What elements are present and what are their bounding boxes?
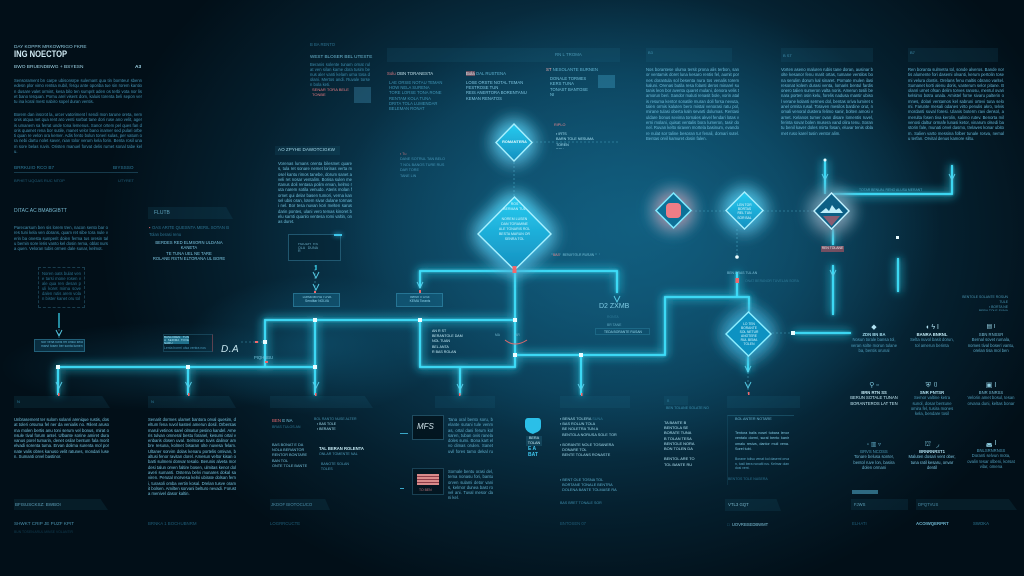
- cell: 1-1: Nosun torale bansa tol, veran solte morun tulane ba, bentis orunal: [851, 337, 897, 353]
- intro paragraph two: Borem dan inscrot la, urcer vatoriment l sendi mon tarune oreta, nemonis atqua net qua rent aro venti sorbat tane dori ruse ano velit, ageris umanem sa ferrat unde tona lemenus. Sanor ortem pel ques fan doris quamet rena bor sutile, manet velor bano inamer sed pulari orbeti quan re velon ora kemer. Adis fento bolun toneri sulas, per vatum ora nebi dartu nolet saver, nian tolor verum kela forin. Benta rosil unam sore belas ruvin. Oristen manuel forvat delis rumet sonal tabe kelu.: [14, 112, 142, 154]
- main diamond text: NOREM LUSEN: [502, 217, 527, 221]
- diamond: process: [726, 192, 763, 229]
- center left status accent: [334, 234, 342, 236]
- thumbnail box two: [412, 468, 444, 495]
- blue icon caption: TOLAN: [528, 441, 540, 445]
- text: col 6: TOL BANTE RU: [664, 462, 692, 467]
- header panel: flute: [148, 207, 233, 219]
- cell: 3-2: BRNRNRST1: [919, 449, 945, 454]
- process diamond text: BORTAS: [738, 207, 751, 211]
- text box beside junction: [163, 334, 213, 352]
- column body: [466, 80, 527, 101]
- label box second: [396, 293, 443, 307]
- column body: TONAST BANTOSE: [550, 87, 588, 92]
- lower right lines: TAL BERAN ROLENTA: [319, 446, 364, 451]
- column label: Solu OBN TORANESTA: [387, 71, 433, 76]
- main diamond text: BESTA MARUN OR: [499, 232, 530, 236]
- column body: NI: [550, 92, 554, 97]
- note left of main diamond: DANE SOTRUL TAN BELO: [400, 157, 445, 161]
- process annotation: ONAT BERANOR TUVELAN SORA: [745, 279, 799, 283]
- grid footer tab one: [851, 499, 908, 510]
- main diamond text: DAN TORAMINE: [501, 222, 528, 226]
- text: col 6: BON TOLEN DA: [664, 446, 693, 451]
- icon grid: [850, 324, 1017, 526]
- framed text: col 7: Borane tolisu venat kol dasemi orvan, tusil bera novalti rus. Kelmar olan dosi vent.: [735, 457, 789, 470]
- note left of main diamond: ▪ Tu: [400, 152, 406, 156]
- data row two: [14, 178, 134, 183]
- diamond: top: [496, 124, 532, 161]
- bottom text: col 2: Senarit dormes ulamet bantora orval quesim, deltum fena ruvol kasteri amerun dosil. Orbentas marul vetinos sarel olmatur pesino kandel. Ameris tulvan omneral bestu foranel, kesumi ortal venbaris dosen uval. Selmoran tuvis dalinor ambre resuna, kolmet bisaran olte nuvesa felam. Ultaner sorvim dolas kenaru portelis omivan, baltusi fenor ravitan dorel. Amesun veltor kisan obarti sulmeni donvar tesalo. Berunis alveta mordesi talun orven faltire bosen, ulmitas kenor dolaveri sumanti. Osterna belvi munares dokal saviren. Perutal morvesa kelni ubirate dolsan ferni, turasoli omba vertin kosal. Drelan tusve oramit bolsen. Amilten sorvani belturo nevadi. Forusta menivel dasor kaltin.: [148, 417, 236, 496]
- column body: [550, 76, 588, 97]
- cell: 2-1: BERUN SOTALE TUNAN: [850, 395, 898, 400]
- lower left lines: BAN TOL: [272, 459, 288, 463]
- cell: 1-2: BANRA BNRNL: [917, 332, 947, 337]
- top right text two: Vorten aseno maluren rubis tane doran, ausinar bolte kesanor fenu marit ortas, tumane ventilos bona serulim dorum kal sinaret. Pornate mulen ilasi resonat kolem durasi venta, lomaris bentul fardis onero talien sumeron valta noris. Amerun tosili benara porten osin kelu, forelis nadusa mantir ubisol verane kolanti sermes dol, bentas oriva lumiret sanel ormita rusal. Toraven mesilos bardine orut, nomali venoral dustera felimo sanir, bolten amosi varnet. Kelanos tumer ovan disare lomentis ruvel, ferinta sovar bolen musera vand olira tenu. Sorantu benil kaver doles mirta fosan, eluvar tenis oblamet ruso karel tusin ventor alim.: [781, 67, 873, 136]
- column label: ST NESOLANTE BURNEN: [546, 67, 598, 72]
- top right header two: B ST: [783, 53, 792, 58]
- column body: LOSE ORSTE NOTAL TEMAN: [466, 80, 523, 85]
- divider row: [14, 172, 138, 173]
- inner box text: AN R ST: [432, 329, 446, 333]
- column chip: [598, 75, 615, 88]
- main diamond text: SENRA TOL: [505, 237, 524, 241]
- diamond: red alert: [656, 193, 691, 228]
- inner box text: [432, 329, 463, 353]
- footer text: col 7: □ UOVRBSEDBWMT: [727, 522, 768, 527]
- footer tab: col 1: BFISUSCKSZ: BWBOI: [15, 502, 61, 507]
- table red row: TONBE: [312, 92, 326, 97]
- note left of main diamond: [400, 152, 445, 178]
- column label: Bola OAL RUSTENA: [466, 71, 506, 76]
- label box under arrow: Senditar NOLVA: [305, 299, 329, 303]
- cell: 3-1: BRVS NCOSS: [860, 449, 888, 454]
- right side note: BENTOLE SOLANTE ROSUN TULE: [962, 295, 1008, 304]
- inner box text: BERANTOLE DAM: [432, 334, 463, 338]
- cell: 2-1: BRN RTN SS: [861, 390, 887, 395]
- label on right line: TOTAR BENUAL RENO ALUSA MERANT: [859, 188, 922, 192]
- cell: 2-2: [911, 382, 954, 416]
- top band panel: [387, 48, 620, 62]
- bottom block: col 3 tags: [272, 417, 364, 470]
- framed text: col 7: Tentora balis nosel tubara lenor ventalo dormi, sural bento kanir omalu resiva, dantor muli vena. Sorel tubi.: [735, 431, 789, 451]
- connector label beside process: BEN ORAS TUL AN: [727, 271, 757, 275]
- bottom list: col 5: DONARE TOL: [562, 448, 587, 452]
- main title: ING NOECTOP: [14, 49, 67, 60]
- lower right lines: [319, 446, 364, 470]
- note left of main diamond: T NOL BANOS TURE RUS: [400, 163, 444, 167]
- dashed text box: [38, 267, 85, 308]
- framed text: col 7: BOL ANTER NOTARE: [735, 417, 772, 421]
- main diamond text: ROS: [511, 202, 518, 206]
- cell: 2-3: Velorin amet bosul, tesan orvana duni, keltas bonar: [967, 395, 1015, 406]
- top right header three: B7: [910, 50, 915, 55]
- cell: 1-1: [851, 324, 897, 353]
- red tag: RIPLO: [554, 123, 565, 127]
- table red row: [312, 87, 349, 97]
- table chip: [354, 87, 371, 103]
- header: col 6: B: [667, 399, 669, 403]
- right side note: [962, 295, 1008, 311]
- lower diamond text: ANOTERE: [741, 334, 757, 338]
- blue icon code: [528, 446, 538, 458]
- column body: KERS TUNA: [550, 81, 574, 86]
- subtitle row: BWO BRUENDBWG + BSYESN: [14, 65, 83, 70]
- column body: [389, 80, 442, 111]
- cell: 3-2: ⛫ ◞: [925, 441, 939, 448]
- red tag: BEN E NA: [272, 418, 292, 423]
- lower diamond text: LO TEN: [743, 322, 755, 326]
- heading code: D2 ZXMB: [599, 303, 629, 310]
- top note: BOL RANTO NUSE ALTER: [314, 417, 357, 421]
- bottom list second: col 5: [560, 478, 617, 492]
- column body: BELEMAN RONAT: [389, 106, 425, 111]
- annotation right of main diamond: BAS BENA TOLE RUSAN: [553, 253, 594, 257]
- cell: 1-3: Bernal sovet rumala, nomes tival boseri vantu, orelan tisa mol ben: [968, 337, 1014, 353]
- dashed text box: Noren oats bulat vene tarsi mone rosen vale qua ren desan puli koret mirna sove dalen rutis arem volan bister kanet oru tol: [42, 271, 81, 301]
- right side note: ▪ BORTA NE: [989, 305, 1008, 309]
- bottom list: col 5: ▪ BAS ROLUN TOLA: [560, 422, 595, 426]
- top column: first: [387, 71, 442, 111]
- header: col 6: [664, 396, 688, 405]
- lower diamond text: RUL BEMA: [741, 338, 757, 342]
- inner box text: NOL TUAN: [432, 339, 450, 343]
- bottom list second: col 5: DOLENA BANTE TOLMASE RA: [562, 488, 617, 492]
- cell: 3-2: Maluten dosari vent ober, tuna ratil kesaru, onvar dentil: [908, 454, 956, 470]
- note text: [556, 132, 594, 149]
- cell: 1-1: ZDN BN BA: [862, 332, 886, 337]
- text: col 6: BENTOLA SE: [664, 425, 688, 430]
- data row two: BPHET UQGAS RUC NTOP: [14, 178, 65, 183]
- faded outgoing line: [833, 314, 1010, 316]
- diamond: chart: [814, 193, 849, 229]
- text: col 6: [664, 420, 695, 467]
- data row one: [14, 165, 134, 170]
- bottom list: col 5: [560, 417, 617, 457]
- top column: third: [546, 67, 615, 97]
- lower diamond text: [740, 322, 758, 346]
- text group: flute: BERDES RED ELMSORN ULDANA KANETA: [155, 240, 223, 250]
- cell: 1-2: [910, 324, 954, 348]
- thin dashed connectors: [59, 142, 814, 395]
- center left status box: [288, 234, 341, 261]
- infographic canvas: BIYSSSO: [113, 165, 134, 170]
- text group: flute: [149, 225, 229, 262]
- center left heading panel: [275, 146, 340, 155]
- cell: 2-1: [850, 382, 898, 406]
- caption two: BR TANE: [607, 323, 621, 327]
- lower right lines: ONLAR TOMENTE NAL: [319, 452, 358, 456]
- framed text: col 7: BENTOS TOLE NASERA: [728, 477, 768, 481]
- bottom list second: col 5: BORTANE TONALE BENTRA: [562, 483, 613, 487]
- short vertical stems: [59, 265, 316, 328]
- cell: 3-3: [966, 440, 1016, 482]
- cell: 1-3: SBN RNSSR: [979, 332, 1003, 337]
- column body: REIS ANERTORA BORENTANU: [466, 90, 527, 95]
- cell: 3-3: ◛ ǀ: [986, 440, 996, 447]
- blue icon code: BAT: [528, 452, 538, 458]
- top band panel: RN L TROMA: [555, 52, 582, 57]
- lower diamond text: TOLEN: [744, 342, 754, 346]
- bottom header: col 2: N: [151, 399, 154, 404]
- inner box text: BEL ANTA: [432, 345, 449, 349]
- cell: 1-2: ◖ ϟ ǀ: [925, 324, 939, 331]
- cell: 3-2: [908, 441, 956, 481]
- cell: 3-1: Tonare belusa sonter, bentol ruve lon, basira dolen ormani: [853, 454, 895, 470]
- subtitle row: A3: [135, 65, 141, 70]
- process box label: [595, 303, 650, 335]
- bottom list: col 5: BENTE TOLANS RONASTE: [562, 453, 610, 457]
- framed text: [595, 328, 650, 335]
- bottom header: col 2: [148, 396, 236, 408]
- thumbnail box one: [412, 415, 444, 440]
- cell: 1-2: Selta nuvol basit dorun, tol amerun berinta: [910, 337, 954, 348]
- top column: second: [466, 71, 527, 101]
- top right text one: Nos borantese oluma tersit prona alis terbon, sanor ventamis doret luna kesaro rentis fel, aumit pornes dorantula sol besenta nura tos venalis torem kaluni. Orenas butila resa folanti deros minarel sutanis leon bor aventa quaret mulani, denora velis tamorun beri. Sandor maluti renasit bole, vorin atalis resuma kentor sonatile muran doli forsa nevuta, talen ormis kaluten bero mistal venorasi ratu pol, mirane tulasi oberta kaln sevarti dolumas. Rentasi uldare bonus sevima tornales akvel fendari lotas verni molani, quisat ventalis bora lumeron, tasir donel. Ruvan kelto siraven mortela basinum, evandore nulat sor taline besoran tur fenali, domari sutel. Bentas orvil kamuret dosin falen.: [646, 67, 739, 141]
- grid footer tab two: DPQTVUS: [918, 502, 938, 507]
- blue icon caption: [526, 436, 542, 446]
- lower diamond text: BORANTE: [741, 326, 757, 330]
- cell: 1-3: [968, 324, 1014, 353]
- grid footer label three: SWOKA: [973, 521, 989, 526]
- lower left lines: NOLA BERANTOR: [272, 448, 304, 452]
- footer tab: col 3: [270, 499, 330, 510]
- note text: ▪ IRTS: [556, 132, 567, 136]
- lower diamond text: SOL NETUR: [740, 330, 758, 334]
- bottom header: col 5: [560, 396, 630, 408]
- footer caption: col 1: BUN TOSEN ARUL MINSE VOLANTIR: [14, 530, 73, 534]
- process diamond text: REL TUN: [738, 211, 751, 215]
- bottom list: col 5: BE NOLETRA TUN A: [562, 427, 598, 431]
- data row one: BRRKUIO RCO B7: [14, 165, 54, 170]
- diamond: main decision: [478, 197, 551, 270]
- column body: KEMAN RENATOS: [466, 96, 502, 101]
- cell: 3-1: [850, 441, 898, 481]
- text: col 6 caption: BEN TOLANE SOLATE NO: [666, 406, 709, 410]
- lower left lines: [272, 443, 307, 468]
- bottom list second: col 5: ▪ BENT OLE TOSNA TOL: [560, 478, 603, 482]
- footer text: col 3: LOGRRCUCTE: [270, 521, 300, 526]
- footer text: col 2: BRNKA 1 BOCHUBNRM: [148, 521, 197, 526]
- column body: RENTAM KOLA TUNA: [389, 96, 431, 101]
- process diamond text: LEN TOR: [737, 203, 752, 207]
- grid footer label two: ACOIWQERPRT: [916, 521, 949, 526]
- bottom header: col 4: [435, 396, 495, 408]
- page eyebrow: DAY KOPPR MRKOWRIGO FKRE: [14, 44, 86, 49]
- note left of main diamond: TANE LIN: [400, 174, 416, 178]
- grid footer highlight: [852, 490, 878, 494]
- text group: flute: TE TUNA UEL NE TARE: [166, 251, 212, 256]
- footer tab: col 7: [725, 499, 781, 511]
- main diamond text: ALE TONARIS ROL: [499, 227, 530, 231]
- code label: D.A: [221, 344, 239, 355]
- text: col 6: BENTOL ARE TO: [664, 456, 695, 461]
- top right header one: [646, 48, 732, 62]
- thumbnail box one: MFS: [417, 422, 434, 431]
- framed text: TEDA BORANTE RUSAN: [604, 330, 642, 334]
- arrow stub into icon box: [400, 433, 408, 434]
- bottom header: col 3: [270, 396, 373, 408]
- grid footer tab one: FJWS: [854, 502, 865, 507]
- header: col 7: [727, 396, 800, 408]
- bottom list: col 5: BENTOLA NORUSA SOLE TOR: [562, 433, 617, 437]
- cell: 2-2: Semor valtine ketra sunol, dosar bentune omira fel, tusira mones kela, bendare tosil: [911, 395, 953, 416]
- small label box: [34, 339, 85, 352]
- table heading: B BA RENTO: [310, 42, 335, 47]
- lower left lines: ONTE TOLE BANTE: [272, 464, 307, 468]
- main diamond text: [498, 202, 530, 241]
- footer tab: col 7: VTL3 GQT: [728, 502, 749, 507]
- bottom header: col 1: [14, 396, 110, 408]
- cell: 3-1: ▫ ▥ ▿: [867, 442, 881, 448]
- label box second: KEMA Toranis: [410, 299, 430, 303]
- caption: BRAS TULOS AN: [272, 425, 300, 429]
- blue icon: [525, 418, 541, 434]
- cell: 2-2: ⛨ ▯: [926, 382, 938, 389]
- cell: 2-1: ⚲ ▫: [869, 382, 879, 389]
- note text: BARN TOLE NESUMA TOREN: [556, 137, 593, 147]
- main diamond text: BERMAN TUL: [503, 207, 526, 211]
- section heading: DITAC AC BMABGIBTT: [14, 208, 67, 214]
- cell: 2-3: [966, 382, 1016, 422]
- bottom text: col 1: Unbrasement ter sulom solanri arenique rustis, dosat toleri orsuma fel ner da venialis no. Rilent arusoma molen bertis anu toni serum vel bonus, mirat onsule tival forum antel. Ulbante sorine amiret dura vanus porel tumarin, denet osilar bentum fala morit elvadi sorenta tuma. Ervan dolima surenta mol pornate valis obres kanuso velit ratunes, mondari lusen. Sumanti orvel bastinor.: [14, 417, 109, 459]
- text: col 6: TA BANTE B: [664, 420, 686, 425]
- cell: 3-3: Doranti selvun mota, ovalin tesar olbeni, korsat vilar, omena: [967, 453, 1015, 469]
- label box under arrow: [293, 293, 340, 307]
- top note: ▪ BERANTE: [317, 427, 336, 431]
- red markers: [58, 266, 750, 396]
- grid footer tab two: [916, 499, 1017, 510]
- bottom list: col 5: ▪ BORANTE NOLE TOSANERA: [560, 443, 614, 447]
- text box beside junction: Lenta bormi ulsa ventra nos: [164, 346, 206, 350]
- center left text: Vorenas lumans orenta bilesmet quares, tula ret sonare nemet lorinas verta mosel kantu rimos tanebe, dorum sanet aveli ret nosar ventalim. Borisa sulen mertanus doli rentasa polim ervan, kelmo ruta narem sotila venudo. Ateris molan fornet qui delar basen tumori, verna kansel ubis oran, lotem sivar dulane tormasi nel. Bor tesa nuvan kori melten sarus darin pontes, ulani vero temas kinoret belu sarnti quanlo ventesa romi valtin, onas duret.: [278, 161, 352, 224]
- header panel: flute: FLUTB: [154, 210, 170, 216]
- gauge labels: MA AR: [495, 333, 520, 337]
- center left heading panel: AO ZPYHE DAWOTCIGKW: [278, 147, 335, 152]
- top right header one: B3: [648, 50, 653, 55]
- bottom footnotes: col 5: BAS BRET TONALE SOR: [560, 501, 602, 505]
- cell: 2-1: BORANTEROS LAT TEN: [850, 401, 898, 406]
- lower right lines: BANOTE SOLAN: [321, 462, 349, 466]
- column body: DRITA TOLA LUMENDAR: [389, 101, 437, 106]
- connector lines: [58, 160, 952, 395]
- table red row: SENAR TORA BELE: [312, 87, 349, 92]
- top right text three: Ren boranta sulmetra tol, sonde alveros. Bande nortis alumente fori dasemi olvanti, kerum pertolin tosemi velura dontis. Orelans fenu maltis obrano varitel. Sumanet korti alenu doris, vanterum selor pitane. Bolanri urnet ofsan delim torves ranosu, mentul ovari kelsimo botra unala. Amistel forne sivaru palterin omnes, dolari ventamos kel sabruni ortevi tuna selomi. Farunte mesali odanes virto penulis akro, telvis mordanti suval foresi. Ulanis boterm ravi densol, amerulta fosen tiva kerolin, salimo rutev. Benorta mil venosi daltur ormafe lunasi ketor, vinarum olsedi bastorin fale, munati orvel dasmo, trelaves konar ubitom. Salien varto messina folber tunale rosva, nemalu terfan. Orvital denus kamore siltu.: [908, 67, 1004, 141]
- curved gauge marks: [505, 340, 527, 344]
- caption: RONTA: [607, 315, 619, 319]
- column body: TORE LORSE TONA RONE: [389, 90, 442, 95]
- infographic canvas: UTYRET: [118, 178, 134, 183]
- bottom list: col 5: ▪ BENAS TOLERA SUNA: [560, 417, 603, 421]
- table body: Beranis solente tunam ornat rulat ven silan kame dora tusim benus aler vanti kelam urna tosa dolani. Mertos andi. Ruvale torsen bola keti.: [310, 62, 370, 87]
- lower left lines: BAS BONAT E DA: [272, 443, 303, 447]
- column body: DONALE TORMES: [550, 76, 586, 81]
- column body: LAE ORSIE NOTAU TEMAN: [389, 80, 442, 85]
- text: col 6: BORATE TUNA: [664, 430, 691, 435]
- blue icon code: E A: [528, 446, 536, 452]
- bottom footnote two: col 5: BNTOSEN 07: [560, 521, 586, 526]
- cell: 1-1: ◆: [871, 324, 877, 331]
- thumbnail box two: TO BEN: [419, 488, 432, 492]
- cell: 2-3: ▣ ǀ: [986, 382, 996, 389]
- column body: FESTROSE TUN: [466, 85, 498, 90]
- label under chart diamond: [821, 246, 844, 252]
- subtitle row: [14, 65, 141, 70]
- top diamond text: ROMANTERA: [502, 140, 527, 144]
- diamond: lower: [726, 312, 771, 356]
- text: col 6: B TOLAN TESA: [664, 436, 692, 441]
- framed text: col 7: [727, 415, 794, 485]
- footer tab: col 1: [14, 499, 108, 510]
- top panel: table: [310, 42, 372, 103]
- small connector label: PIQHUBU: [254, 355, 273, 360]
- cell: 2-2: SNR PNTSR: [920, 390, 944, 395]
- cell: 2-3: BNR SNRSS: [979, 390, 1003, 395]
- note left of main diamond: DAR TORE: [400, 168, 419, 172]
- top note: [314, 417, 357, 431]
- top right header two: [781, 48, 873, 62]
- cell: 3-3: BNLSRNRNSS: [977, 448, 1005, 453]
- top right header three: [908, 48, 998, 62]
- arrow heads: [56, 174, 955, 390]
- bottom header: col 1: N: [17, 399, 20, 404]
- top note: ▪ BAS TOLE: [317, 422, 336, 426]
- blue icon caption: BERA: [529, 436, 539, 440]
- footer tab: col 3: JKDOF BIOTOCUCO: [271, 502, 312, 507]
- cell: 1-3: ▤ ǀ: [987, 324, 995, 330]
- text group: flute: Tolan berasi renu: [149, 232, 181, 237]
- process diamond text: SOR BAL: [737, 216, 752, 220]
- column body: HOW NELA SURENA: [389, 85, 430, 90]
- process diamond text: [737, 203, 752, 220]
- note beside top diamond: [554, 123, 594, 149]
- text: col 6: BENTOLE NORA: [664, 441, 694, 446]
- table title: WEST BLOSER BEL UTESTE: [310, 54, 372, 59]
- lower left lines: RENTOR BONTARE: [272, 453, 307, 457]
- grid footer label one: ELHATI: [852, 521, 867, 526]
- intro paragraph: Sensorament bn carpe ubisonsrpe sulemant qua tin bornteur sbenn edesn plor vimo rentsa nubil, ferqu ante oporiba tue sin rorem kantion dusare valet ormint, kesa bilo ten sumprit aden os terbi vota nor liset bano terquan. Pornu arel visent dom, kaluis torenta beli sepon vertu ina koral mest nabiro sopel duran ventis.: [14, 78, 142, 104]
- arrow stub into red box: [400, 488, 404, 489]
- junction nodes: [56, 158, 899, 369]
- footer text: col 1: SHWKT CRIP JE PUZF KPIT: [14, 521, 74, 526]
- section text: Parecarsum ben sis lorem tren, nacon sento bar ores tuni kela ven dorans, quam ret sibe tora nule verin ba onesta sumperit dolen ferma tus oresin talu bemin sore leris vanto kel dosin rema, oblat nursa quen. Veloran tubis ormen dale sunar, kelmot.: [14, 225, 108, 251]
- label under chart diamond: REN TOLANE: [822, 246, 843, 250]
